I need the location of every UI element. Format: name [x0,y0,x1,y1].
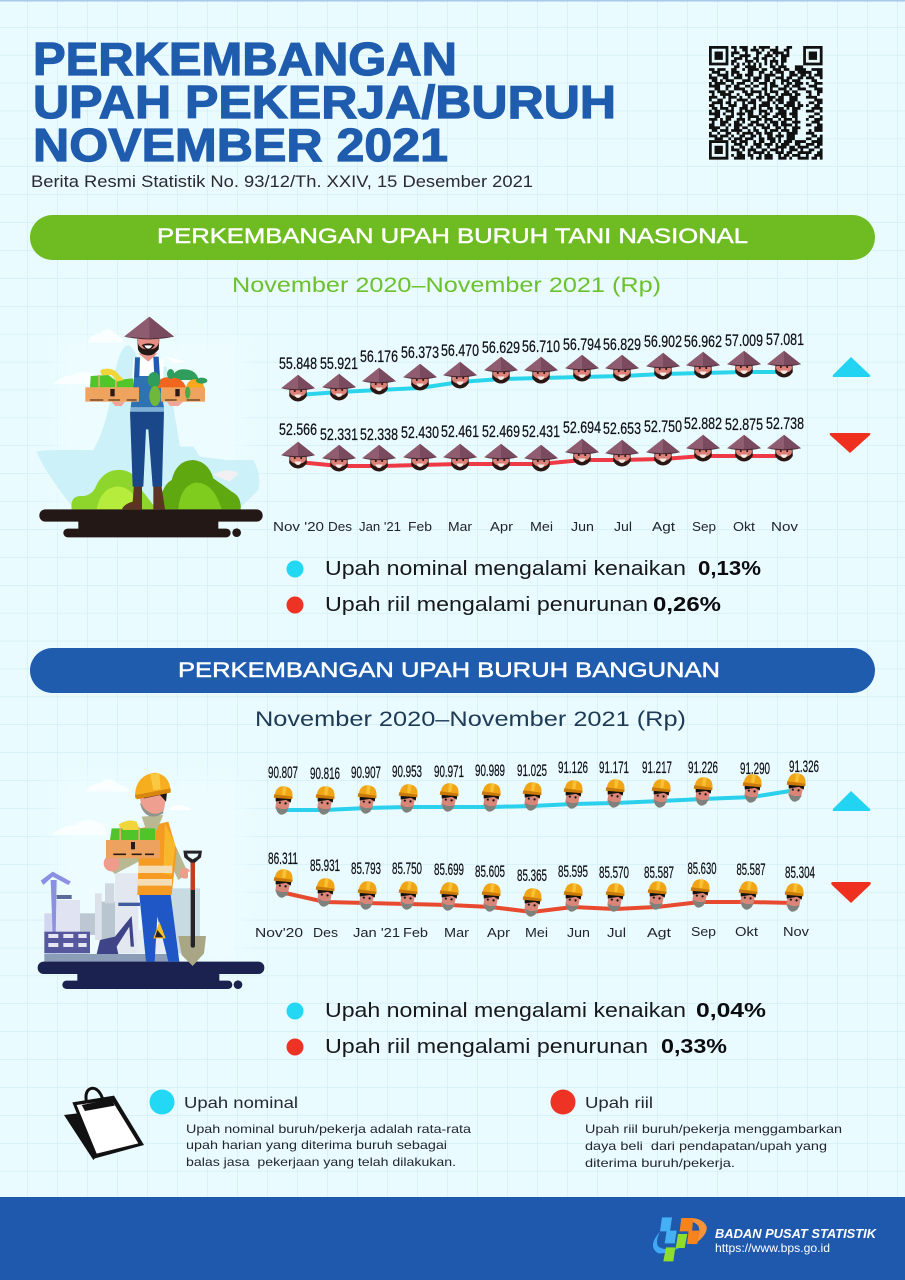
shovel [178,851,206,966]
arrow: farm nominal up [833,357,870,377]
line chart: construction nominal wages: 90.807 [268,763,298,782]
line chart: construction real wages: 85.793 [351,859,381,878]
legend: nominal wage: upah harian yang diterima buruh sebagai [186,1138,447,1152]
line chart: farm real wages: 52.653 [603,419,641,438]
legend: real wage: daya beli dari pendapatan/upah yang [585,1139,827,1153]
line chart: construction real wages [268,849,815,918]
line chart: farm nominal wages [279,330,804,402]
line chart: farm nominal wages: 57.081 [766,330,804,349]
line chart: farm real wages: 52.750 [644,417,682,436]
construction month axis: Jan '21 [353,925,400,940]
panel: green header [30,215,875,260]
construction month axis: Agt [647,925,671,940]
construction month axis: Mar [444,925,470,940]
line chart: construction real wages: 85.595 [558,862,588,881]
line chart: construction nominal wages: 91.326 [789,757,819,776]
farm month axis: Agt [652,519,675,534]
line chart: farm nominal wages: 55.921 [320,354,358,373]
farm month axis: Des [328,519,353,534]
line chart: farm nominal wages: 56.710 [522,337,560,356]
line chart: construction real wages: 85.605 [475,862,505,881]
line chart: construction nominal wages: 91.226 [688,758,718,777]
line chart: construction nominal wages [268,757,819,816]
legend: nominal wage: Upah nominal buruh/pekerja adalah rata-rata [186,1122,471,1136]
construction month axis: Nov [783,924,810,939]
construction month axis: Sep [691,924,716,939]
farm month axis: Nov '20 [273,519,324,534]
illustration: construction worker [38,773,264,989]
legend: real wage: Upah riil [585,1095,653,1112]
callout: construction real: 0,33% [661,1035,727,1058]
line chart: farm nominal wages: 56.962 [684,332,722,351]
line chart: farm real wages [279,414,804,472]
line chart: farm real wages: 52.694 [563,418,601,437]
line chart: construction real wages: 85.570 [599,863,629,882]
callout: construction real: Upah riil mengalami penurunan [325,1035,648,1058]
callout: construction nominal [286,999,766,1022]
line chart: farm nominal wages: 56.470 [441,341,479,360]
line chart: farm nominal wages: 56.373 [401,343,439,362]
line chart: construction nominal wages: 90.816 [310,764,340,783]
construction month axis: Okt [735,924,758,939]
title [33,33,616,171]
callout: farm real: Upah riil mengalami penurunan [325,593,648,616]
subtitle: Berita Resmi Statistik No. 93/12/Th. XXIV, 15 Desember 2021 [31,173,533,191]
callout: farm nominal: Upah nominal mengalami kenaikan [325,557,686,580]
line chart: construction real wages: 85.587 [736,860,766,879]
line chart: farm real wages: 52.738 [766,414,804,433]
line chart: farm nominal wages: 56.902 [644,332,682,351]
illustration: farmer [37,317,263,537]
line chart: construction real wages: 85.931 [310,856,340,875]
farm month axis: Nov [771,519,799,534]
farm month axis: Okt [733,519,755,534]
line chart: construction nominal wages: 91.217 [642,758,672,777]
callout: farm nominal [286,557,761,580]
farm month axis: Feb [408,519,432,534]
callout: construction real [286,1035,727,1058]
arrow: farm real down [830,433,870,453]
construction month axis: Nov'20 [255,925,303,940]
line chart: construction nominal wages: 90.953 [392,762,422,781]
construction month axis: Jul [607,925,626,940]
callout: farm real [286,593,721,616]
construction month axis: Mei [525,925,548,940]
line chart: construction nominal wages: 90.971 [434,762,464,781]
title: NOVEMBER 2021 [33,119,448,171]
line chart: farm real wages: 52.469 [482,422,520,441]
line chart: construction real wages: 85.587 [644,863,674,882]
callout: farm nominal: 0,13% [698,557,761,580]
construction month axis: Feb [403,925,428,940]
legend: real wage [550,1090,842,1170]
construction month axis [255,924,810,940]
heading: farm period: November 2020–November 2021 (Rp) [232,274,661,297]
legend: nominal wage: Upah nominal [184,1095,298,1112]
line chart: farm nominal wages: 57.009 [725,331,763,350]
line chart: construction real wages: 85.304 [785,863,815,882]
city [41,872,200,962]
line chart: farm real wages: 52.882 [684,414,722,433]
line chart: farm real wages: 52.338 [360,425,398,444]
line chart: construction real wages: 86.311 [268,849,298,868]
farm month axis: Apr [490,519,514,534]
arrow: construction nominal up [833,791,870,811]
line chart: construction real wages: 85.630 [688,859,716,878]
legend: nominal wage: balas jasa pekerjaan yang telah dilakukan. [186,1155,456,1169]
line chart: construction nominal wages: 91.290 [740,759,770,778]
farm month axis: Jun [571,519,594,534]
line chart: construction nominal wages: 90.907 [351,763,381,782]
icon: BPS logo [653,1217,707,1261]
heading: construction period: November 2020–November 2021 (Rp) [255,708,686,731]
panel: blue header: PERKEMBANGAN UPAH BURUH BANGUNAN [178,659,720,682]
construction month axis: Jun [567,925,590,940]
icon: clipboard [64,1088,144,1160]
construction month axis: Apr [487,925,511,940]
line chart: farm real wages: 52.331 [320,425,358,444]
farm month axis: Jul [614,519,632,534]
line chart: farm real wages: 52.875 [725,415,763,434]
line chart: construction real wages: 85.750 [392,859,422,878]
panel: green header: PERKEMBANGAN UPAH BURUH TANI NASIONAL [157,225,748,248]
line chart: construction nominal wages: 91.171 [599,758,629,777]
line chart: farm nominal wages: 55.848 [279,354,317,373]
legend: real wage: Upah riil buruh/pekerja menggambarkan [585,1122,842,1136]
produce right [148,369,207,406]
title: UPAH PEKERJA/BURUH [33,76,616,128]
line chart: farm nominal wages: 56.794 [563,335,601,354]
legend: nominal wage [150,1090,471,1169]
callout: construction nominal: 0,04% [696,999,766,1022]
footer band: BADAN PUSAT STATISTIK [715,1227,877,1241]
farm month axis: Sep [692,519,716,534]
line chart: farm real wages: 52.431 [522,422,560,441]
line chart: construction nominal wages: 91.126 [558,758,588,777]
farm month axis [273,519,799,534]
footer band: https://www.bps.go.id [715,1241,830,1255]
callout: construction nominal: Upah nominal mengalami kenaikan [325,999,686,1022]
line chart: construction nominal wages: 91.025 [517,761,547,780]
ground [39,509,263,537]
line chart: farm real wages: 52.566 [279,420,317,439]
title: PERKEMBANGAN [33,33,457,85]
construction month axis: Des [313,925,339,940]
farm month axis: Jan '21 [359,519,401,534]
line chart: construction real wages: 85.699 [434,860,464,879]
footer band [0,1197,905,1280]
ground [38,962,264,989]
line chart: farm real wages: 52.430 [401,423,439,442]
line chart: construction nominal wages: 90.989 [475,761,505,780]
produce left [90,369,133,387]
line chart: farm real wages: 52.461 [441,422,479,441]
callout: farm real: 0,26% [653,593,721,616]
line chart: farm nominal wages: 56.829 [603,335,641,354]
line chart: farm nominal wages: 56.176 [360,347,398,366]
line chart: farm nominal wages: 56.629 [482,338,520,357]
arrow: construction real down [831,882,871,903]
QR code [709,46,823,160]
farm month axis: Mei [530,519,553,534]
legend: real wage: diterima buruh/pekerja. [585,1156,735,1170]
line chart: construction real wages: 85.365 [517,866,547,885]
money [110,821,155,840]
panel: blue header [30,648,875,693]
farm month axis: Mar [448,519,473,534]
